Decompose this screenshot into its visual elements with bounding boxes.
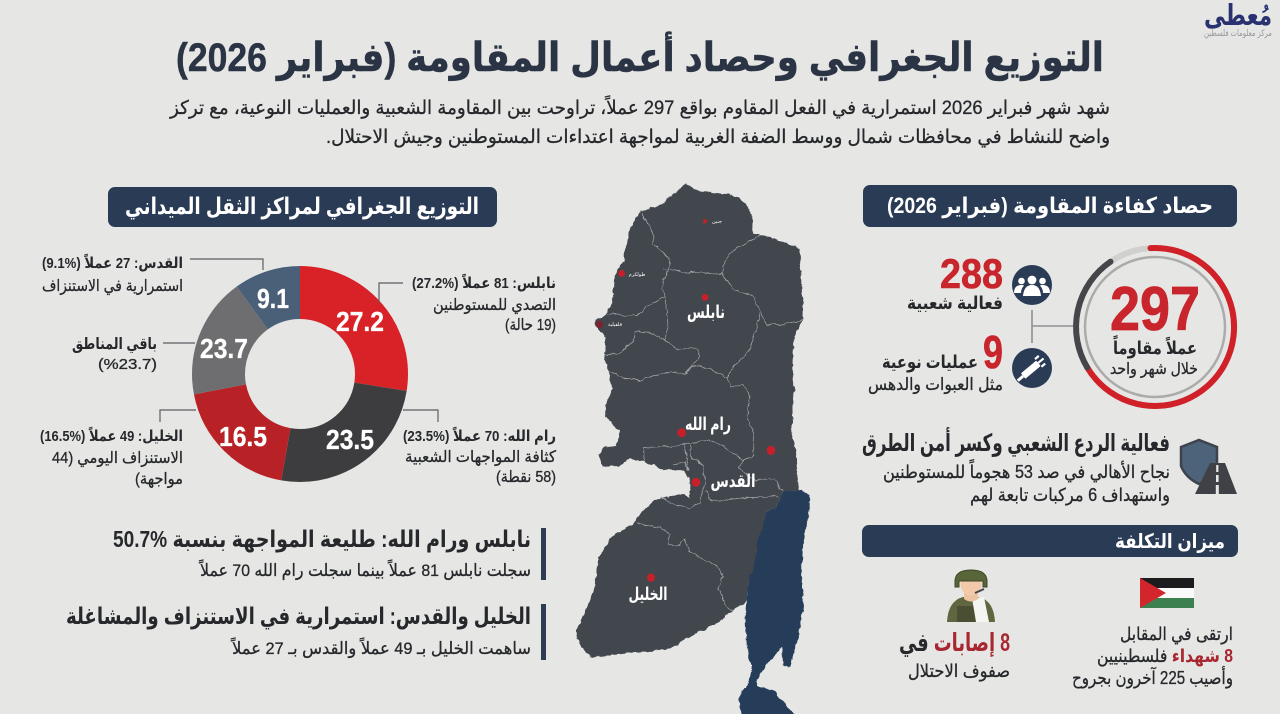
label: remaining areas: باقي المناطق	[72, 336, 157, 354]
land outline	[576, 184, 803, 658]
label: Jerusalem: استمرارية في الاستنزاف	[42, 278, 183, 296]
callout: Nablus and Ramallah: سجلت نابلس 81 عملاً بينما سجلت رام الله 70 عملاً	[198, 559, 531, 580]
stat: 288	[907, 250, 1003, 313]
map of the West Bank: القدس	[710, 471, 756, 491]
label: Nablus: نابلس: 81 عملاً (%27.2)	[412, 273, 556, 292]
intro text: شهد شهر فبراير 2026 استمرارية في الفعل المقاوم بواقع 297 عملاً، تراوحت بين المقاومة الشعبية والعمليات النوعية، مع تركز	[169, 95, 1110, 119]
heading: geographic distribution	[108, 187, 497, 227]
stat: 9 operations: مثل العبوات والدهس	[868, 375, 1003, 394]
panel: cost balance	[862, 525, 1238, 689]
heading: cost balance: ميزان التكلفة	[1115, 531, 1225, 553]
label: Hebron: الخليل: 49 عملاً (%16.5)	[40, 426, 183, 445]
connector	[1031, 310, 1033, 343]
map of the West Bank: قلقيلية	[608, 322, 623, 328]
label: Ramallah: (58 نقطة)	[496, 469, 556, 486]
connector	[1032, 325, 1073, 327]
heading: resistance harvest	[863, 185, 1237, 227]
panel: geographic distribution	[40, 187, 556, 660]
label: remaining areas	[72, 336, 195, 373]
injuries text: 8 إصابات في	[899, 629, 1010, 657]
label: Jerusalem	[42, 253, 263, 296]
label: Hebron: الاستنزاف اليومي (44	[52, 450, 183, 468]
martyrs text: وأصيب 225 آخرون بجروح	[1072, 666, 1233, 689]
donut chart: 23.7	[200, 333, 248, 364]
injuries text: صفوف الاحتلال	[908, 661, 1010, 682]
donut chart	[200, 283, 384, 456]
icon: shield and road	[1181, 440, 1237, 494]
stat: 288: فعالية شعبية	[907, 293, 1003, 313]
heading: geographic distribution: التوزيع الجغرافي لمراكز الثقل الميداني	[125, 193, 479, 220]
donut chart: 9.1	[257, 283, 289, 314]
deterrence text: نجاح الأهالي في صد 53 هجوماً للمستوطنين	[883, 459, 1170, 483]
stat: 9 operations: 9	[983, 326, 1003, 378]
heading: resistance harvest: حصاد كفاءة المقاومة (فبراير 2026)	[887, 193, 1213, 219]
label: Nablus	[379, 273, 556, 334]
callout: Hebron and Jerusalem	[66, 603, 546, 660]
stat: 9 operations	[868, 326, 1003, 394]
stat: 288: 288	[940, 250, 1003, 297]
label: Ramallah: كثافة المواجهات الشعبية	[405, 449, 556, 467]
icon: wounded soldier	[947, 570, 995, 622]
injuries text	[899, 629, 1010, 682]
map of the West Bank: الخليل	[628, 584, 668, 604]
ring stat: 297: 297	[1110, 275, 1200, 344]
panel: resistance harvest	[862, 185, 1237, 506]
heading: cost balance	[862, 525, 1238, 557]
icon: explosive device	[1012, 348, 1052, 388]
donut chart: 23.5	[326, 424, 374, 455]
intro text: واضح للنشاط في محافظات شمال ووسط الضفة الغربية لمواجهة اعتداءات المستوطنين وجيش الاحتلال.	[326, 127, 1110, 148]
title: التوزيع الجغرافي وحصاد أعمال المقاومة (فبراير 2026)	[176, 31, 1104, 81]
deterrence text	[862, 427, 1170, 506]
stat: 9 operations: عمليات نوعية	[882, 352, 978, 373]
donut chart: 16.5	[219, 421, 267, 452]
Dead Sea	[738, 491, 810, 714]
label: Nablus: (19 حالة)	[505, 317, 556, 334]
ring stat: 297	[1076, 248, 1234, 406]
map of the West Bank: جنين	[712, 219, 722, 225]
callout: Hebron and Jerusalem: الخليل والقدس: استمرارية في الاستنزاف والمشاغلة	[66, 603, 531, 630]
label: Ramallah	[403, 410, 556, 486]
map of the West Bank: رام الله	[685, 414, 731, 434]
martyrs text	[1072, 624, 1233, 689]
map of the West Bank	[576, 184, 810, 714]
label: Nablus: التصدي للمستوطنين	[433, 297, 556, 315]
martyrs text: 8 شهداء فلسطينيين	[1097, 646, 1233, 667]
ring stat: 297: خلال شهر واحد	[1110, 361, 1198, 379]
intro text	[169, 95, 1110, 148]
icon: people	[1012, 265, 1052, 305]
label: Hebron: مواجهة)	[135, 471, 183, 489]
label: Ramallah: رام الله: 70 عملاً (%23.5)	[403, 426, 556, 445]
map of the West Bank: طولكرم	[629, 272, 645, 278]
label: Jerusalem: القدس: 27 عملاً (%9.1)	[42, 253, 183, 272]
callout: Hebron and Jerusalem: ساهمت الخليل بـ 49 عملاً والقدس بـ 27 عملاً	[230, 637, 531, 658]
callout: Nablus and Ramallah	[113, 526, 546, 580]
ring stat: 297: عملاً مقاوماً	[1113, 335, 1197, 359]
map labels: نابلس	[687, 302, 725, 322]
donut chart: 27.2	[336, 306, 384, 337]
icon: Palestinian flag	[1140, 578, 1194, 608]
martyrs text: ارتقى في المقابل	[1120, 624, 1233, 645]
label: remaining areas: (%23.7)	[98, 356, 157, 373]
label: Hebron	[40, 410, 196, 489]
callout: Nablus and Ramallah: نابلس ورام الله: طليعة المواجهة بنسبة %50.7	[113, 526, 531, 553]
deterrence text: واستهداف 6 مركبات تابعة لهم	[970, 485, 1170, 506]
